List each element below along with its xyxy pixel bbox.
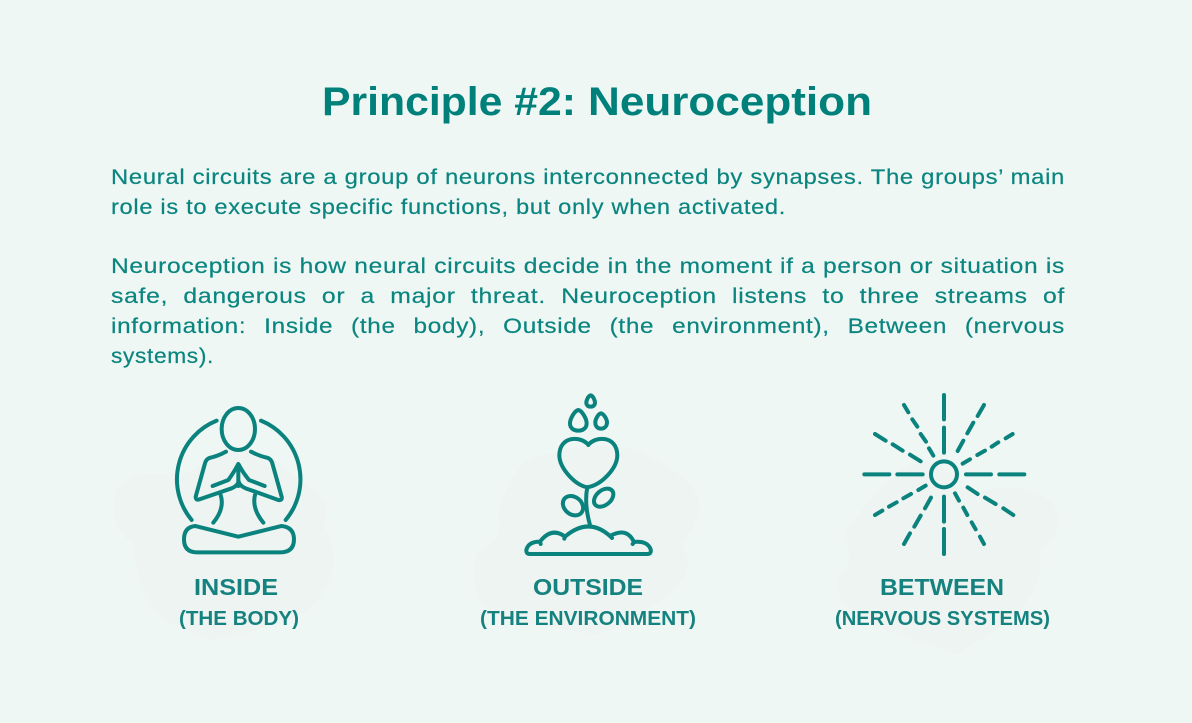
text block: neuroception: systems).	[111, 345, 214, 368]
icon: heart plant	[526, 395, 651, 554]
title: Neuroception	[588, 80, 872, 124]
label: inside: INSIDE	[194, 574, 278, 600]
text block: neural circuits	[111, 166, 1065, 219]
icon: radiating sun	[864, 395, 1024, 554]
text block: neuroception: safe, dangerous or a major threat. Neuroception listens to three streams of	[111, 285, 1065, 308]
label: between	[835, 574, 1050, 630]
watercolor blob: inside	[113, 450, 333, 640]
label: inside: (THE BODY)	[179, 608, 299, 630]
panel: outside	[473, 395, 700, 634]
label: outside: (THE ENVIRONMENT)	[480, 608, 696, 630]
icon: meditating figure	[177, 408, 300, 552]
text block: neuroception: information: Inside (the body), Outside (the environment), Between (nervous	[111, 315, 1065, 338]
panel: between	[835, 395, 1058, 655]
label: outside: OUTSIDE	[533, 574, 643, 600]
watercolor blob: outside	[473, 446, 700, 634]
title: Principle #2:	[322, 80, 576, 124]
text block: neuroception	[111, 255, 1065, 368]
text block: neural circuits: role is to execute specific functions, but only when activated.	[111, 196, 786, 219]
title	[322, 80, 872, 124]
text block: neuroception: Neuroception is how neural circuits decide in the moment if a person or situation is	[111, 255, 1065, 278]
watercolor blob: between	[837, 461, 1058, 655]
label: between: BETWEEN	[880, 574, 1004, 600]
panel: inside	[113, 408, 333, 640]
label: inside	[179, 574, 299, 630]
text block: neural circuits: Neural circuits are a group of neurons interconnected by synapses. The groups’ main	[111, 166, 1065, 189]
label: between: (NERVOUS SYSTEMS)	[835, 608, 1050, 630]
label: outside	[480, 574, 696, 630]
